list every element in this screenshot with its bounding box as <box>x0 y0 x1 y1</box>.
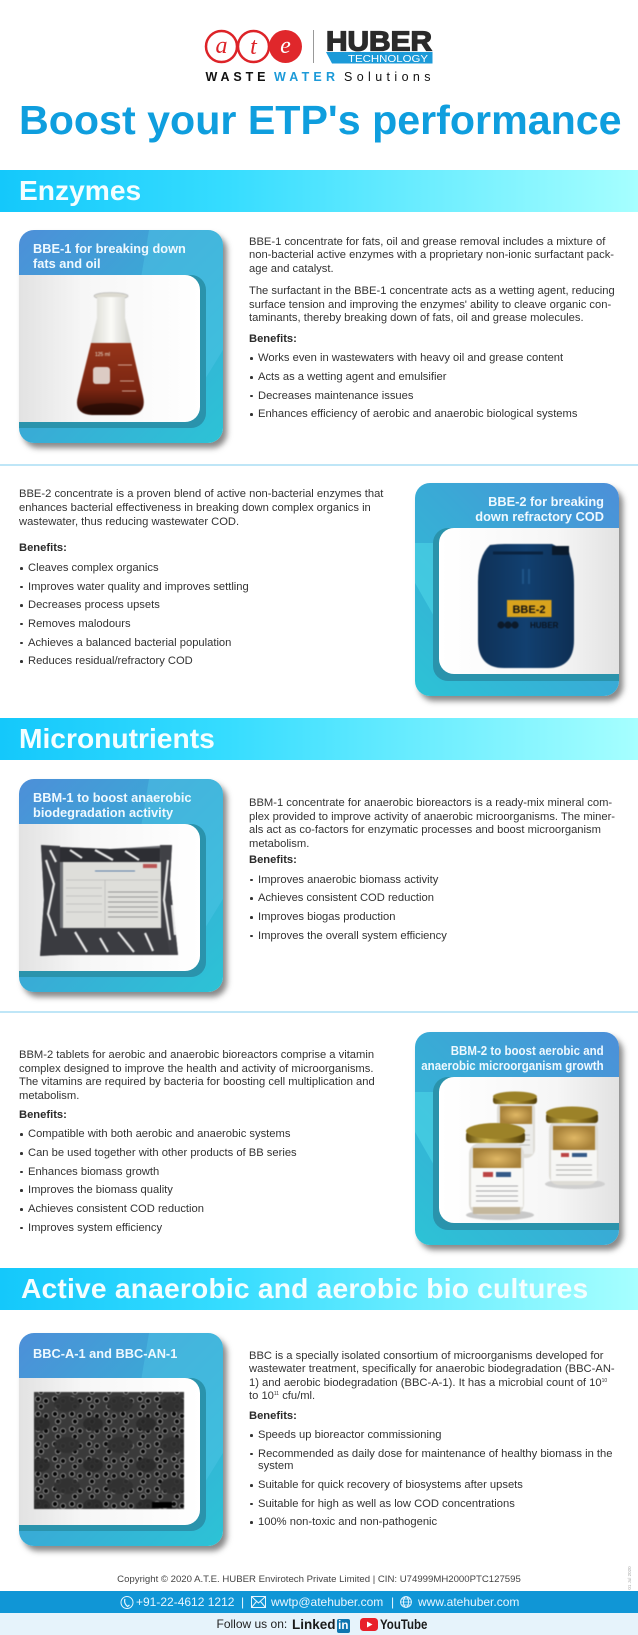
card heading: BBC-A-1 and BBC-AN-1 <box>33 1346 177 1361</box>
icon: LinkedIn: in <box>338 1620 348 1632</box>
text block: BBE-2 description and benefits: wastewater, thus reducing wastewater COD. <box>19 516 239 528</box>
logo: ATE Huber Waste Water Solutions: a <box>216 33 228 59</box>
text block: BBC description and benefits: 100% non-toxic and non-pathogenic <box>258 1516 437 1528</box>
text block: BBM-2 description and benefits: Improves system efficiency <box>28 1222 162 1234</box>
logo: ATE Huber Waste Water Solutions: Solutions <box>344 70 433 84</box>
card heading: BBM-2 to boost aerobic and <box>451 1043 604 1058</box>
text block: BBE-1 description and benefits: BBE-1 concentrate for fats, oil and grease removal includes a mixture of <box>249 236 605 248</box>
icon: phone <box>120 1596 134 1609</box>
text block: BBM-2 description and benefits: The vitamins are required by bacteria for boosting cell multiplication and <box>19 1076 375 1088</box>
card heading: BBE-2 for breaking <box>488 494 604 509</box>
follow text: Follow us on: <box>216 1616 287 1630</box>
card heading <box>475 494 604 524</box>
phone number: +91-22-4612 1212 <box>136 1595 234 1609</box>
text block: BBE-1 description and benefits: surface tension and improving the enzymes' ability to cleave organic con- <box>249 299 611 311</box>
text block: BBC description and benefits: Speeds up bioreactor commissioning <box>258 1429 441 1441</box>
text block: BBE-2 description and benefits: Removes malodours <box>28 618 131 630</box>
card heading <box>422 1043 604 1073</box>
copyright line: Copyright © 2020 A.T.E. HUBER Envirotech Private Limited | CIN: U74999MH2000PTC127595 <box>117 1574 521 1585</box>
text block: BBC description and benefits: BBC is a specially isolated consortium of microorganisms developed for <box>249 1350 603 1362</box>
text block: BBE-2 description and benefits: enhances bacterial effectiveness in breaking down complex organics in <box>19 502 371 514</box>
logo: ATE Huber Waste Water Solutions: t <box>250 34 258 60</box>
card heading: BBM-1 to boost anaerobic <box>33 790 192 805</box>
icon: blue jerrycan with BBE-2 label: HUBER <box>530 621 559 630</box>
logo: ATE Huber Waste Water Solutions: e <box>280 33 291 59</box>
text block: BBC description and benefits: Recommended as daily dose for maintenance of healthy biomass in the <box>258 1448 612 1460</box>
text block: BBM-1 description and benefits: metabolism. <box>249 838 309 850</box>
text block: BBM-2 description and benefits: Improves the biomass quality <box>28 1184 173 1196</box>
text block: BBC description and benefits: Suitable for quick recovery of biosystems after upsets <box>258 1479 523 1491</box>
card heading <box>33 241 186 271</box>
icon: foil pouch <box>39 844 179 957</box>
text block: BBE-2 description and benefits: BBE-2 concentrate is a proven blend of active non-bacterial enzymes that <box>19 488 383 500</box>
text block: BBE-1 description and benefits: non-bacterial active enzymes with a proprietary non-ionic surfactant pack- <box>249 249 614 261</box>
text block: BBM-2 description and benefits <box>19 1049 375 1234</box>
text block: BBE-1 description and benefits: taminants, thereby breaking down of fats, oil and grease molecules. <box>249 312 584 324</box>
text block: BBE-2 description and benefits: Achieves a balanced bacterial population <box>28 637 231 649</box>
text block: BBE-1 description and benefits: Acts as a wetting agent and emulsifier <box>258 371 446 383</box>
panel: BBC-A-1 and BBC-AN-1 card <box>19 1333 223 1546</box>
text block: BBE-2 description and benefits: Improves water quality and improves settling <box>28 581 249 593</box>
icon: blue jerrycan with BBE-2 label <box>477 543 575 669</box>
text block: BBE-2 description and benefits: Benefits: <box>19 542 67 554</box>
panel: BBE-1 product card <box>19 230 223 443</box>
back jar <box>493 1092 537 1158</box>
text block: BBM-1 description and benefits: Achieves consistent COD reduction <box>258 892 434 904</box>
banner: Enzymes: Enzymes <box>19 174 141 206</box>
email: wwtp@atehuber.com <box>271 1595 383 1609</box>
text block: BBE-1 description and benefits: age and catalyst. <box>249 263 334 275</box>
banner: Enzymes <box>0 170 638 212</box>
panel: BBM-2 product card <box>415 1032 619 1245</box>
text block: BBM-2 description and benefits: Achieves consistent COD reduction <box>28 1203 204 1215</box>
text block: BBM-2 description and benefits: metabolism. <box>19 1090 79 1102</box>
banner: Micronutrients: Micronutrients <box>19 722 215 754</box>
banner: Active anaerobic and aerobic bio cultures: Active anaerobic and aerobic bio cultures <box>21 1272 588 1304</box>
icon: blue jerrycan with BBE-2 label: BBE-2 <box>512 604 546 616</box>
text block: BBE-2 description and benefits <box>19 488 384 667</box>
text block: BBC description and benefits <box>249 1350 615 1528</box>
card heading: down refractory COD <box>475 509 604 524</box>
text block: BBM-2 description and benefits: Can be used together with other products of BB series <box>28 1147 297 1159</box>
text block: BBC description and benefits: Benefits: <box>249 1410 297 1422</box>
icon: globe <box>400 1596 412 1608</box>
date stamp: 01 Jul 2020 <box>627 1566 632 1590</box>
text block: BBM-1 description and benefits: Improves the overall system efficiency <box>258 930 447 942</box>
website: www.atehuber.com <box>418 1595 519 1609</box>
social bar <box>0 1613 638 1635</box>
text block: BBM-1 description and benefits: Benefits: <box>249 854 297 866</box>
text block: BBC description and benefits: wastewater treatment, specifically for anaerobic biodegradation (BBC-AN- <box>249 1363 615 1375</box>
text block: BBE-1 description and benefits: Decreases maintenance issues <box>258 390 413 402</box>
logo: ATE Huber Waste Water Solutions <box>204 26 433 84</box>
text block: BBE-1 description and benefits: Works even in wastewaters with heavy oil and grease content <box>258 352 563 364</box>
icon: LinkedIn: Linked <box>292 1617 336 1632</box>
icon: flask of red liquid <box>76 292 145 416</box>
text block: BBM-1 description and benefits: plex provided to improve activity of anaerobic microorganisms. The miner- <box>249 811 615 823</box>
icon: three glass jars with gold lids <box>465 1090 605 1220</box>
text block: BBC description and benefits: to 1011 cfu/ml. <box>249 1390 315 1402</box>
text block: BBE-1 description and benefits <box>249 236 615 420</box>
text block: BBM-2 description and benefits: complex designed to improve the health and activity of microorganisms. <box>19 1063 373 1075</box>
text block: BBM-1 description and benefits: Improves anaerobic biomass activity <box>258 874 438 886</box>
logo: ATE Huber Waste Water Solutions: HUBER <box>326 26 432 56</box>
text block: BBE-2 description and benefits: Decreases process upsets <box>28 599 160 611</box>
text block: BBE-2 description and benefits: Cleaves complex organics <box>28 562 159 574</box>
front jar <box>466 1123 525 1215</box>
logo: ATE Huber Waste Water Solutions: TECHNOLOGY <box>348 53 428 65</box>
card heading: anaerobic microorganism growth <box>422 1058 604 1073</box>
right jar <box>546 1106 598 1185</box>
banner: Micronutrients <box>0 718 638 760</box>
text block: BBC description and benefits: system <box>258 1460 293 1472</box>
card heading: BBE-1 for breaking down <box>33 241 186 256</box>
text block: BBC description and benefits: Suitable for high as well as low COD concentrations <box>258 1498 515 1510</box>
text block: BBM-1 description and benefits: Improves biogas production <box>258 911 395 923</box>
text block: BBM-1 description and benefits: als act as co-factors for enzymatic processes and boost microorganism <box>249 824 601 836</box>
image: microscope view of bacterial culture <box>33 1391 185 1510</box>
text block: BBE-1 description and benefits: The surfactant in the BBE-1 concentrate acts as a wetting agent, reducing <box>249 285 615 297</box>
card heading: fats and oil <box>33 256 101 271</box>
contact bar: | <box>241 1595 244 1609</box>
panel: BBE-2 product card <box>415 483 619 696</box>
card heading <box>33 790 192 820</box>
text block: BBM-1 description and benefits <box>249 797 615 942</box>
text block: BBE-2 description and benefits: Reduces residual/refractory COD <box>28 655 193 667</box>
icon: flask of red liquid: 125 ml <box>95 352 110 358</box>
contact bar: | <box>391 1595 394 1609</box>
icon: YouTube: YouTube <box>380 1616 427 1632</box>
text block: BBM-2 description and benefits: Enhances biomass growth <box>28 1166 159 1178</box>
panel: BBM-1 product card <box>19 779 223 992</box>
logo: ATE Huber Waste Water Solutions: WATER <box>274 70 337 84</box>
text block: BBM-2 description and benefits: Compatible with both aerobic and anaerobic systems <box>28 1128 290 1140</box>
logo: ATE Huber Waste Water Solutions: WASTE <box>206 70 268 84</box>
text block: BBE-1 description and benefits: Enhances efficiency of aerobic and anaerobic biological systems <box>258 408 577 420</box>
banner: Active anaerobic and aerobic bio cultures <box>0 1268 638 1310</box>
title: Boost your ETP's performance <box>19 97 622 143</box>
icon: envelope <box>251 1596 266 1608</box>
contact bar <box>0 1591 638 1613</box>
text block: BBE-1 description and benefits: Benefits: <box>249 333 297 345</box>
text block: BBM-2 description and benefits: Benefits: <box>19 1109 67 1121</box>
card heading: biodegradation activity <box>33 805 173 820</box>
text block: BBM-2 description and benefits: BBM-2 tablets for aerobic and anaerobic bioreactors comprise a vitamin <box>19 1049 374 1061</box>
text block: BBC description and benefits: 1) and aerobic biodegradation (BBC-A-1). It has a microbial count of 1010 <box>249 1377 607 1389</box>
text block: BBM-1 description and benefits: BBM-1 concentrate for anaerobic bioreactors is a ready-mix mineral com- <box>249 797 612 809</box>
